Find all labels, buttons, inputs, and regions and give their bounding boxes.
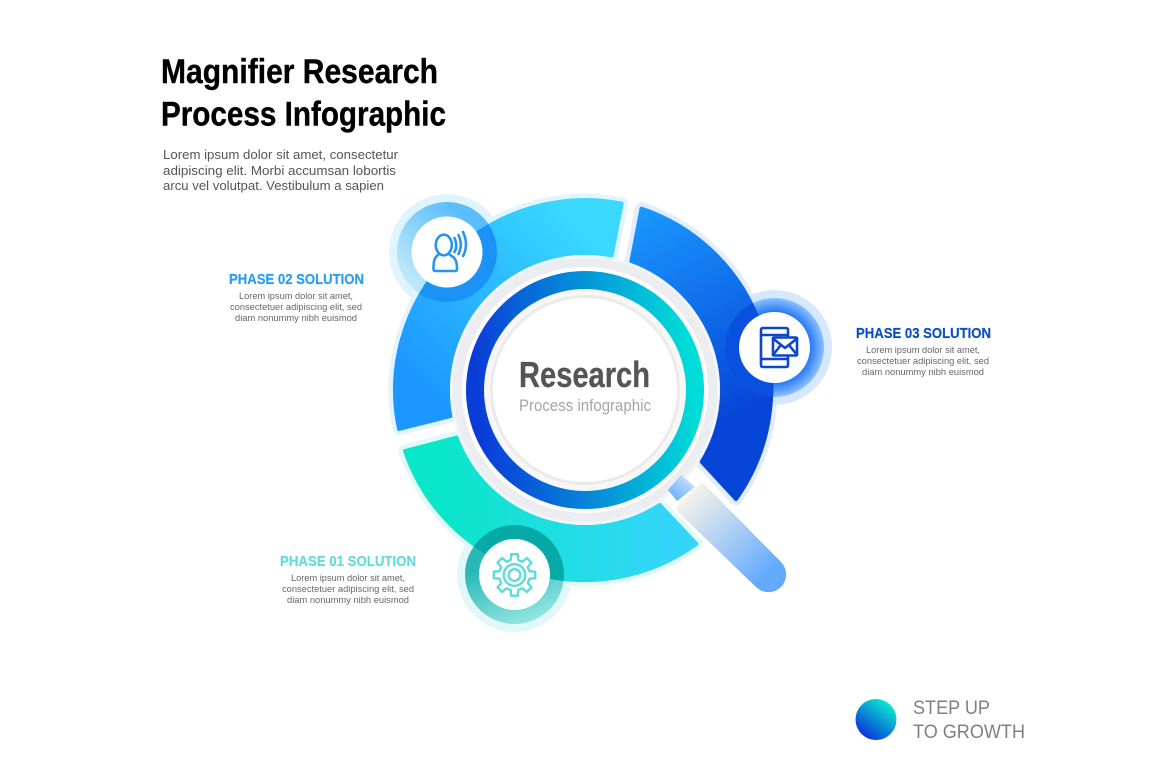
phase 03 text: PHASE 03 SOLUTION	[856, 325, 991, 342]
phase 03 text: Lorem ipsum dolor sit amet,	[866, 345, 980, 355]
intro text block: arcu vel volutpat. Vestibulum a sapien	[163, 179, 384, 193]
intro text block	[163, 148, 398, 193]
center subheading: Process infographic	[519, 396, 651, 415]
icon halo: phase 02	[389, 194, 505, 310]
title	[161, 53, 446, 134]
phase 02 text	[229, 271, 364, 323]
band halos	[395, 200, 771, 580]
icon halo: phase 01	[457, 517, 572, 632]
panel: phase 01 band segment	[402, 436, 698, 582]
phase 02 text: Lorem ipsum dolor sit amet,	[239, 291, 353, 301]
phase 01 text	[280, 553, 416, 605]
center heading: Research	[519, 354, 650, 395]
icon: gradient sphere	[856, 699, 896, 740]
footer tagline: STEP UP	[913, 698, 990, 719]
phase 02 text: consectetuer adipiscing elit, sed	[230, 302, 362, 312]
phase 01 text: consectetuer adipiscing elit, sed	[282, 584, 414, 594]
phase 03 text	[856, 325, 991, 377]
title: Magnifier Research	[161, 53, 438, 91]
magnifier lens	[450, 255, 720, 525]
icon: phase 01 gear	[479, 539, 550, 610]
panel: phase 03 band segment	[629, 206, 774, 502]
intro text block: Lorem ipsum dolor sit amet, consectetur	[163, 148, 398, 162]
icon: phase 02 person with sound waves	[412, 216, 482, 288]
title: Process Infographic	[161, 96, 446, 134]
phase 01 text: PHASE 01 SOLUTION	[280, 553, 416, 570]
icon halo: phase 03	[717, 290, 832, 405]
magnifier handle	[668, 475, 786, 592]
icon: phase 03 phone with envelope	[739, 312, 810, 383]
phase 01 text: diam nonummy nibh euismod	[287, 595, 409, 605]
phase 03 text: consectetuer adipiscing elit, sed	[857, 356, 989, 366]
footer tagline	[913, 698, 1025, 743]
phase 02 text: diam nonummy nibh euismod	[235, 313, 357, 323]
panel: phase 02 band segment	[395, 200, 622, 429]
phase 03 text: diam nonummy nibh euismod	[862, 367, 984, 377]
phase 02 text: PHASE 02 SOLUTION	[229, 271, 364, 288]
footer tagline: TO GROWTH	[913, 722, 1025, 743]
intro text block: adipiscing elit. Morbi accumsan lobortis	[163, 164, 396, 178]
phase 01 text: Lorem ipsum dolor sit amet,	[291, 573, 405, 583]
